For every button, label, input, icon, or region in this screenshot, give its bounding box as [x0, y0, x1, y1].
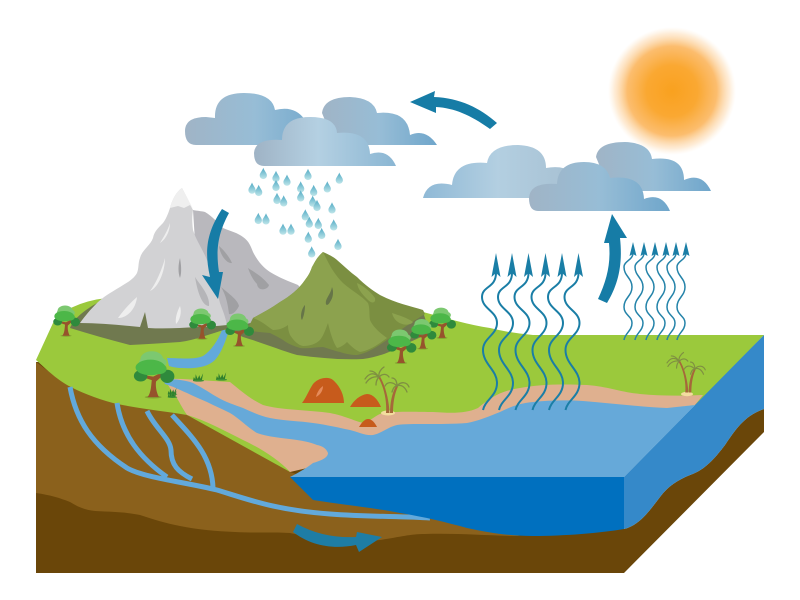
small rock: [359, 419, 377, 427]
tributary stream 2: [117, 403, 167, 477]
arrow: condensation rising: [598, 214, 627, 303]
rain drops: [248, 168, 343, 258]
tree: far left: [53, 305, 80, 337]
arrow: groundwater flow: [293, 524, 382, 552]
cloud: right back: [423, 145, 590, 198]
evaporation arrows from the far land: [624, 242, 690, 340]
tree: cluster back: [429, 308, 456, 339]
back grey mountain: [193, 210, 320, 325]
mountain light streaks: [118, 223, 181, 324]
front grey mountain: [80, 188, 227, 328]
cloud: raining front: [254, 117, 396, 166]
upper river: [167, 330, 229, 368]
green mountain: [247, 252, 425, 355]
large rock: [302, 378, 344, 403]
palm trees on the lake shore: [365, 367, 409, 416]
lake and river water surface: [163, 379, 695, 477]
sea side face: [624, 335, 764, 529]
cloud: right front: [529, 162, 670, 211]
cloud: upper middle back: [322, 97, 437, 145]
medium rock: [350, 394, 381, 407]
green mountain lit patches: [357, 283, 413, 325]
tree: river source: [225, 314, 254, 347]
tributary stream 4: [172, 415, 213, 488]
snow cap: [170, 188, 193, 209]
mountain base shadow: [70, 303, 430, 359]
green mountain lit slope: [253, 252, 387, 352]
arrow: clouds moving over land: [410, 91, 497, 129]
land surface: [36, 290, 764, 472]
main groundwater flow: [70, 387, 430, 518]
cloud: upper left back: [185, 93, 325, 145]
beach sand: [165, 379, 703, 472]
rocks: [302, 378, 381, 427]
tree: large riverside: [134, 351, 174, 398]
sun: [608, 27, 736, 155]
tree: mountain foot: [189, 308, 216, 340]
earth block: lower bedrock: [36, 362, 764, 573]
tree: cluster middle: [410, 319, 436, 350]
green mountain rock crevices: [301, 287, 333, 320]
earth block: upper soil layer: [36, 362, 520, 543]
arrow: surface runoff down the mountain: [202, 209, 229, 299]
tributary stream 3: [147, 411, 192, 479]
cloud: far right back: [596, 142, 711, 191]
palm trees on the sea shore: [667, 352, 705, 396]
tree: cluster front: [387, 330, 416, 364]
groundwater streams: [70, 387, 430, 518]
evaporation arrows from the lake: [482, 253, 583, 410]
sea front cross-section: [290, 477, 624, 536]
grass tufts: [168, 372, 227, 398]
mountain shaded rock patches: [178, 246, 269, 314]
